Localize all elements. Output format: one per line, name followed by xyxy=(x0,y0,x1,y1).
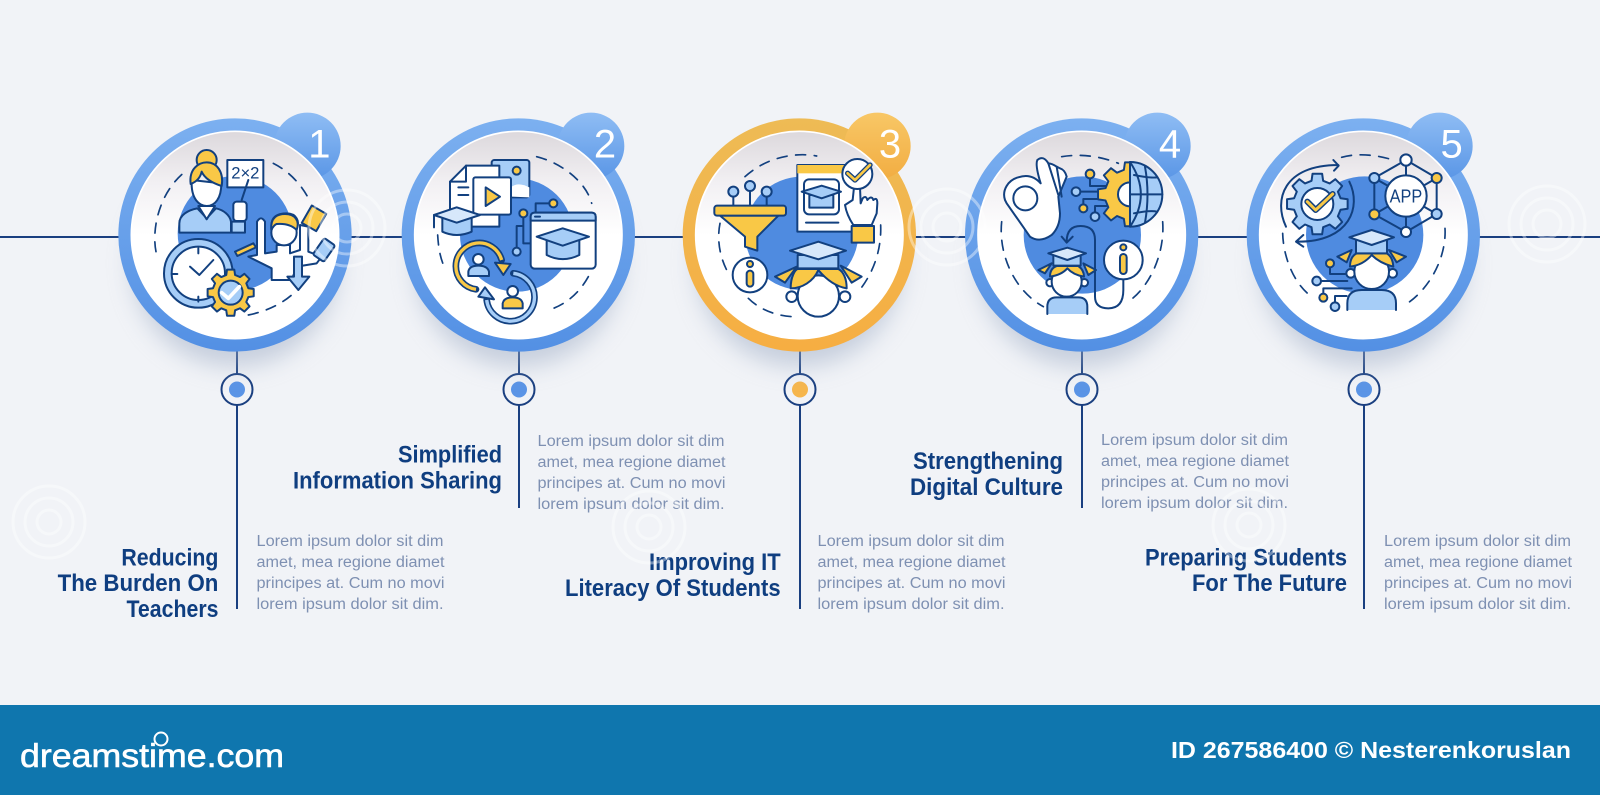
number badge 1: 1 xyxy=(308,122,330,166)
text block: step 2 description: Lorem ipsum dolor sit dim xyxy=(538,433,724,450)
heading: Simplified Information Sharing: Simplified xyxy=(398,442,502,469)
text block: step 3 description: amet, mea regione diamet xyxy=(818,554,1006,571)
step 2 connector and node xyxy=(504,350,534,508)
text block: step 2 description: amet, mea regione diamet xyxy=(538,454,726,471)
text block: step 5 description: principes at. Cum no movi xyxy=(1384,575,1572,592)
step 5 connector and node xyxy=(1348,350,1380,609)
footer logo: dreamstime.com: dreamstime.com xyxy=(20,737,284,774)
text block: step 4 description: amet, mea regione diamet xyxy=(1101,453,1290,470)
heading: Improving IT Literacy Of Students: Literacy Of Students xyxy=(565,575,781,602)
icon: settings gear, app network, student and circuit xyxy=(1281,154,1445,311)
text block: step 3 description: Lorem ipsum dolor sit dim xyxy=(818,533,1004,550)
number badge 2 xyxy=(558,113,624,179)
text block: step 2 description: lorem ipsum dolor sit dim. xyxy=(538,496,724,513)
panel: step 4 circle xyxy=(965,113,1198,367)
heading: Simplified Information Sharing: Information Sharing xyxy=(293,468,502,495)
text block: step 4 description: principes at. Cum no movi xyxy=(1101,474,1289,491)
text block: step 2 description: principes at. Cum no movi xyxy=(538,475,726,492)
heading: Reducing The Burden On Teachers: The Burden On xyxy=(58,570,218,597)
icon: media documents, graduation cap, window and exchange arrows xyxy=(434,157,596,321)
panel: step 2 circle xyxy=(402,113,635,367)
heading: Strengthening Digital Culture: Strengthening xyxy=(913,448,1063,475)
text block: step 4 description: Lorem ipsum dolor sit dim xyxy=(1101,432,1288,449)
number badge 4 xyxy=(1124,113,1191,179)
text block: step 5 description: lorem ipsum dolor sit dim. xyxy=(1384,596,1571,613)
text block: step 5 description xyxy=(1384,533,1573,613)
text block: step 4 description xyxy=(1101,432,1290,512)
number badge 2: 2 xyxy=(594,122,616,166)
heading: Improving IT Literacy Of Students xyxy=(565,549,781,602)
text block: step 5 description: Lorem ipsum dolor sit dim xyxy=(1384,533,1571,550)
text block: step 4 description: lorem ipsum dolor sit dim. xyxy=(1101,495,1288,512)
icon: settings gear, app network, student and circuit: APP xyxy=(1390,186,1422,207)
text block: step 3 description: principes at. Cum no movi xyxy=(818,575,1006,592)
heading: Preparing Students For The Future xyxy=(1145,545,1347,597)
text block: step 1 description xyxy=(256,533,445,613)
number badge 5 xyxy=(1406,113,1473,179)
icon: teacher, multitasking person, clock and gear xyxy=(155,150,335,316)
heading: Reducing The Burden On Teachers: Reducing xyxy=(121,545,218,572)
number badge 5: 5 xyxy=(1441,122,1463,166)
heading: Preparing Students For The Future: Preparing Students xyxy=(1145,545,1347,572)
step 3 connector and node xyxy=(784,350,816,609)
footer bar xyxy=(0,705,1600,795)
text block: step 5 description: amet, mea regione diamet xyxy=(1384,554,1573,571)
heading: Reducing The Burden On Teachers xyxy=(58,545,218,623)
panel: step 3 circle xyxy=(683,113,916,367)
number badge 3: 3 xyxy=(879,122,901,166)
text block: step 3 description: lorem ipsum dolor sit dim. xyxy=(818,596,1004,613)
heading: Improving IT Literacy Of Students: Improving IT xyxy=(649,549,781,576)
number badge 3 xyxy=(844,113,911,179)
icon: teacher, multitasking person, clock and gear: 2×2 xyxy=(231,164,259,183)
icon: funnel, online course, student with cap xyxy=(714,155,881,317)
step 4 connector and node xyxy=(1066,350,1098,508)
icon: ok hand, gear globe, student and info xyxy=(1001,155,1163,314)
heading: Strengthening Digital Culture: Digital Culture xyxy=(910,474,1063,501)
text block: step 3 description xyxy=(818,533,1006,613)
text block: step 1 description: lorem ipsum dolor sit dim. xyxy=(256,596,444,613)
footer credit: ID 267586400 © Nesterenkoruslan xyxy=(1171,737,1571,763)
text block: step 2 description xyxy=(538,433,726,513)
text block: step 1 description: principes at. Cum no movi xyxy=(256,575,444,592)
heading: Strengthening Digital Culture xyxy=(910,448,1063,501)
number badge 4: 4 xyxy=(1159,122,1181,166)
heading: Preparing Students For The Future: For The Future xyxy=(1192,570,1347,597)
heading: Reducing The Burden On Teachers: Teachers xyxy=(126,596,218,623)
panel: step 1 circle xyxy=(118,113,352,367)
text block: step 1 description: Lorem ipsum dolor sit dim xyxy=(256,533,444,550)
panel: step 5 circle xyxy=(1247,113,1480,367)
number badge 1 xyxy=(274,113,341,179)
text block: step 1 description: amet, mea regione diamet xyxy=(256,554,445,571)
heading: Simplified Information Sharing xyxy=(293,442,502,495)
step 1 connector and node xyxy=(222,350,252,609)
timeline horizontal line xyxy=(0,236,1600,238)
